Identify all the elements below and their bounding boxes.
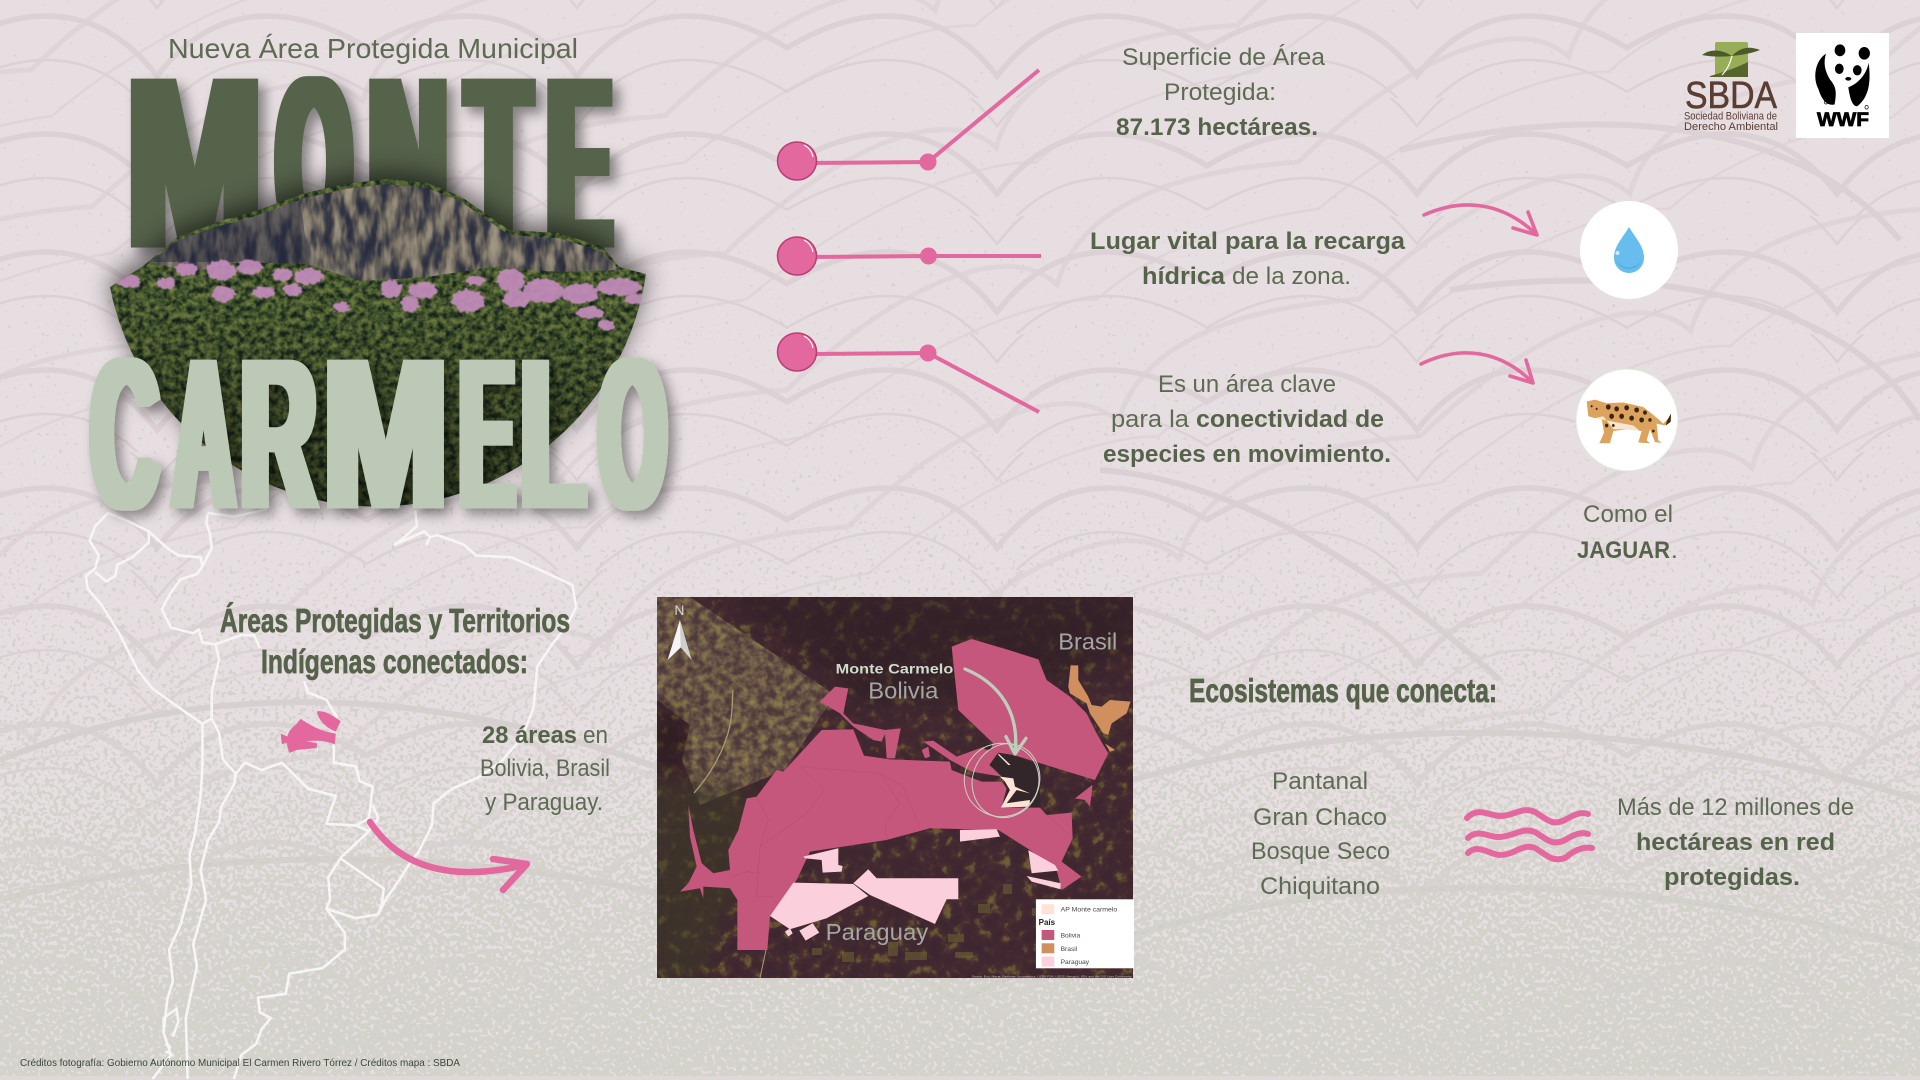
map: legend [1036,899,1134,968]
map: legend: Bolivia [1061,933,1081,940]
title: carmelo: E [460,313,514,554]
text: E [548,26,611,299]
map: legend: AP Monte carmelo [1061,907,1118,914]
arrow: to water icon [1424,205,1537,235]
text: 28 areas: y Paraguay. [485,789,603,816]
icon: waves [1467,810,1592,859]
map: north arrow: N [674,602,684,618]
text: 12 millones [1617,794,1854,891]
title: monte: N [369,26,447,299]
list: ecosistemas: Bosque Seco [1251,838,1390,865]
map: attribution: Source: Esri, Maxar, Earthstar Geographics, USDA FSA, USGS, Aerogrid, IGN, and the GIS User Community [972,974,1132,978]
list: ecosistemas [1251,768,1390,900]
map: small dark notch [983,744,993,750]
connector 1 [778,70,1039,180]
text: 28 areas: Bolivia, Brasil [480,755,610,782]
heading: nueva area: Nueva Área Protegida Municipal [168,33,578,64]
title: carmelo: M [323,313,448,554]
arrow: map to satellite map [370,822,527,890]
text: 28 areas [480,722,610,816]
text: 12 millones: hectáreas en red [1636,829,1835,856]
text: como el jaguar: Como el [1583,501,1673,528]
text: conectividad: Es un área clave [1158,371,1336,398]
map: labels: Paraguay [826,919,929,945]
title: carmelo: R [241,313,316,554]
text: superficie: Superficie de Área [1122,44,1325,71]
logo: SBDA: Sociedad Boliviana de [1684,110,1777,122]
map: brasil polygon [1068,665,1131,752]
list: ecosistemas: Chiquitano [1260,873,1380,900]
text: como el jaguar: JAGUAR [1577,537,1670,564]
protected areas location in pink [281,711,340,753]
title: monte: M [127,26,262,299]
text: conectividad: conectividad de [1196,406,1384,433]
map: legend: Brasil [1061,946,1078,953]
map: labels: Bolivia [868,678,938,704]
map: labels [826,628,1117,945]
title: carmelo: A [173,313,234,554]
arrow: to jaguar icon [1421,353,1533,383]
title: monte: T [467,26,530,299]
text: como el jaguar: . [1671,537,1678,564]
text: 28 areas: 28 áreas [482,722,577,749]
text: O [599,313,666,554]
map: labels: Brasil [1058,628,1117,654]
map: highlight circles [959,734,1050,827]
logo: SBDA: SBDA [1685,75,1778,117]
credits: Créditos fotografía: Gobierno Autónomo Municipal El Carmen Rivero Tórrez / Créditos mapa : SBDA [20,1057,460,1069]
map: bolivia polygons [680,639,1108,950]
title: monte: O [277,26,351,299]
text: 12 millones: protegidas. [1664,864,1800,891]
text: conectividad: especies en movimiento. [1103,441,1391,468]
connector 3 [778,333,1039,412]
logo: SBDA [1684,42,1778,133]
text: 28 areas: en [583,722,608,749]
heading: areas protegidas [220,602,570,680]
text: recarga hidrica: Lugar vital para la recarga [1090,228,1405,255]
map: arrow to monte carmelo [965,669,1026,754]
text: superficie [1116,44,1325,141]
heading: areas protegidas: Áreas Protegidas y Territorios [220,602,570,639]
text: conectividad: para la [1111,406,1189,433]
map: labels: Monte Carmelo [836,661,953,676]
map: north arrow [668,602,692,660]
panel: satellite map [650,590,1140,980]
icon: jaguar [1576,369,1678,471]
connector 2 [778,237,1041,275]
text: 12 millones: Más de 12 millones de [1617,794,1854,821]
text: recarga hidrica: hídrica [1142,263,1225,290]
text: como el jaguar [1577,501,1678,564]
list: ecosistemas: Pantanal [1272,768,1368,795]
map: legend: País [1039,918,1056,927]
icon: water drop [1580,201,1678,299]
title: carmelo: C [91,313,158,554]
map: internal boundaries [730,767,1073,897]
text: recarga hidrica [1090,228,1405,290]
logo: WWF [1796,33,1889,138]
south america outline map [86,509,576,1079]
list: ecosistemas: Gran Chaco [1253,804,1387,831]
title: carmelo: L [521,313,585,554]
text: recarga hidrica: de la zona. [1232,263,1351,290]
photo: monte carmelo mountain [100,170,660,520]
heading: areas protegidas: Indígenas conectados: [261,643,528,680]
map: paraguay polygons [770,829,1061,941]
map: legend: Paraguay [1061,959,1090,966]
map: monte carmelo area [998,753,1030,808]
text: superficie: Protegida: [1164,79,1276,106]
logo: WWF: WWF [1817,110,1869,131]
heading: ecosistemas: Ecosistemas que conecta: [1189,672,1497,709]
map: monte carmelo base [989,753,1040,808]
text: superficie: 87.173 hectáreas. [1116,114,1318,141]
panel: key facts with connectors [778,44,1405,468]
logo: SBDA: Derecho Ambiental [1684,121,1778,133]
text: conectividad [1103,371,1391,468]
